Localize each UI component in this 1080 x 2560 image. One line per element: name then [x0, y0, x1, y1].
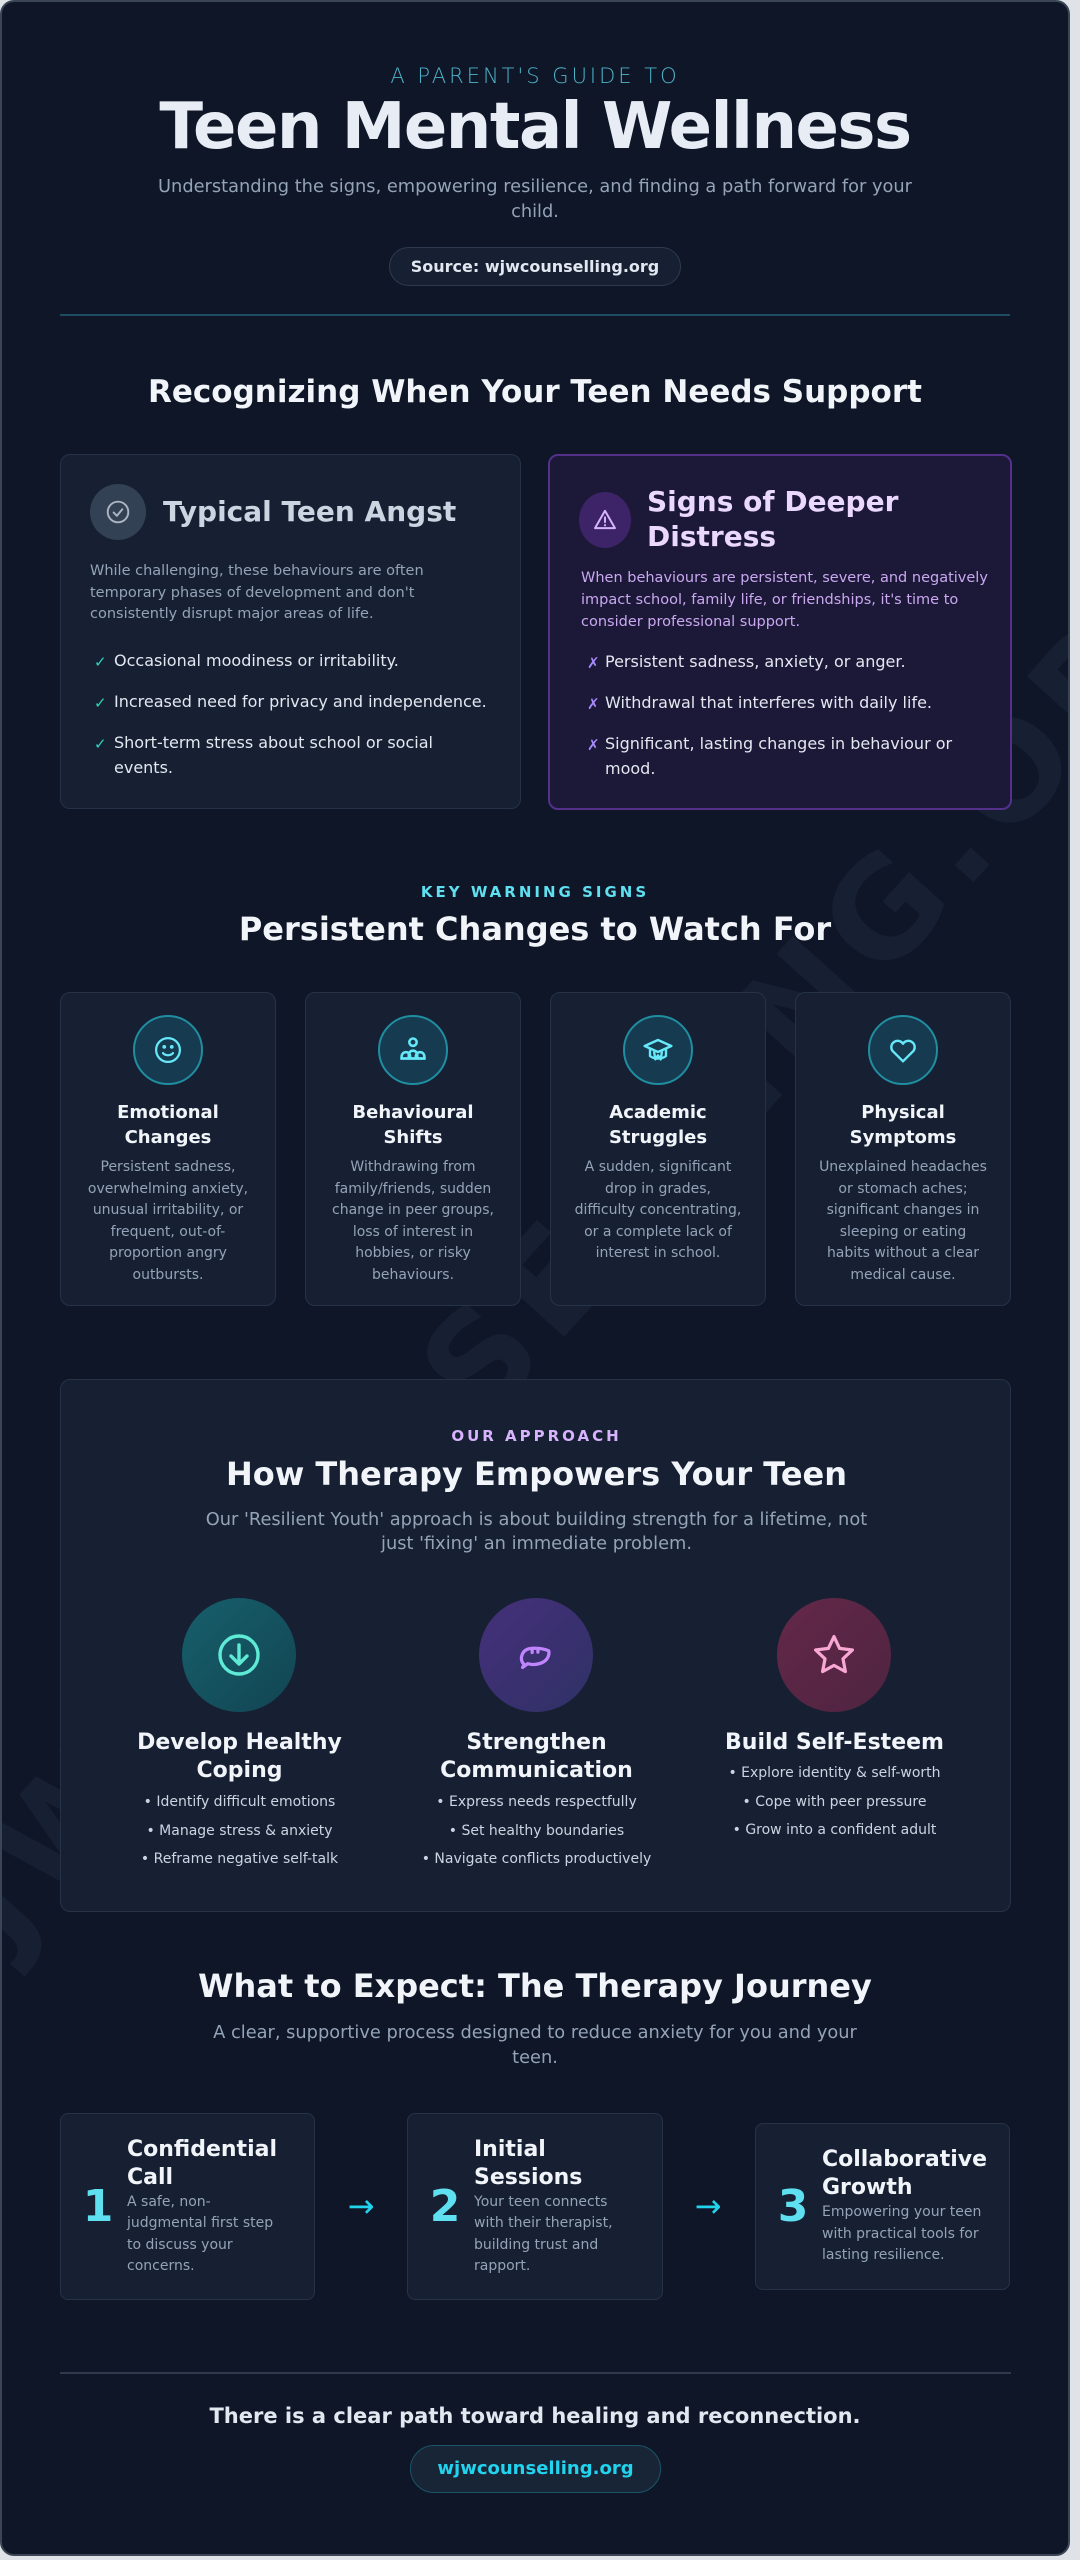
card text: change in peer groups, — [332, 1202, 494, 1218]
icon: person — [378, 1015, 448, 1085]
card text: outbursts. — [132, 1266, 203, 1282]
approach description: Our 'Resilient Youth' approach is about building strength for a lifetime, not — [206, 1509, 867, 1530]
card text: frequent, out-of- — [111, 1224, 225, 1240]
card text: or a complete lack of — [584, 1224, 732, 1240]
card text: interest in school. — [596, 1245, 720, 1261]
column title — [137, 1730, 342, 1783]
step 2: 2 — [430, 2181, 460, 2232]
title: Teen Mental Wellness — [159, 90, 911, 164]
column title: Develop Healthy — [137, 1730, 342, 1755]
column bullets — [422, 1794, 651, 1867]
card text: drop in grades, — [605, 1180, 711, 1196]
panel description: consider professional support. — [581, 614, 800, 630]
bullet list: events. — [114, 758, 173, 777]
source pill — [389, 247, 681, 286]
column bullets: • Set healthy boundaries — [449, 1823, 624, 1839]
closing statement: There is a clear path toward healing and reconnection. — [209, 2404, 861, 2428]
card: behavioural shifts — [305, 992, 521, 1306]
card text — [819, 1159, 987, 1282]
step 2: Initial — [474, 2136, 546, 2162]
icon: warning — [579, 492, 631, 548]
step 1: Call — [127, 2164, 173, 2190]
card text: hobbies, or risky — [355, 1245, 471, 1261]
icon: check circle — [90, 484, 146, 540]
column bullets: • Identify difficult emotions — [144, 1794, 335, 1810]
card text: overwhelming anxiety, — [88, 1180, 248, 1196]
column: communication — [422, 1598, 651, 1867]
card text — [575, 1159, 741, 1261]
card text — [332, 1159, 494, 1282]
card text: Unexplained headaches — [819, 1159, 987, 1175]
card title — [117, 1102, 219, 1148]
approach description: just 'fixing' an immediate problem. — [381, 1533, 692, 1554]
card title: Academic — [609, 1102, 707, 1123]
panel description: temporary phases of development and don't — [90, 584, 414, 600]
heading: how therapy empowers: How Therapy Empowers Your Teen — [226, 1455, 847, 1493]
step 3: with practical tools for — [822, 2226, 979, 2242]
step 3: 3 — [778, 2181, 808, 2232]
step 3: Empowering your teen — [822, 2204, 981, 2220]
panel title: Distress — [647, 520, 776, 553]
arrow 2: → — [695, 2187, 721, 2225]
column bullets — [141, 1794, 338, 1867]
journey description: A clear, supportive process designed to reduce anxiety for you and your — [213, 2022, 857, 2043]
column bullets: • Cope with peer pressure — [743, 1794, 926, 1810]
step 1: Confidential — [127, 2136, 277, 2162]
column title: Strengthen — [466, 1730, 607, 1755]
card title: Symptoms — [850, 1127, 956, 1148]
panel description: While challenging, these behaviours are often — [90, 563, 424, 579]
arrow 1: → — [348, 2187, 374, 2225]
step 2: rapport. — [474, 2258, 530, 2274]
step 1: to discuss your — [127, 2236, 233, 2252]
column title: Build Self-Esteem — [725, 1730, 944, 1755]
step 1: concerns. — [127, 2258, 195, 2274]
card title: Emotional — [117, 1102, 219, 1123]
card: academic struggles — [550, 992, 766, 1306]
column bullets — [728, 1765, 941, 1838]
bullet list: ✓ — [94, 735, 107, 753]
heading: recognizing: Recognizing When Your Teen Needs Support — [148, 374, 922, 410]
card text: unusual irritability, or — [93, 1202, 243, 1218]
card text: family/friends, sudden — [335, 1180, 491, 1196]
step 3: Growth — [822, 2175, 913, 2200]
card text: loss of interest in — [353, 1224, 473, 1240]
bullet list: ✗ — [587, 736, 600, 754]
journey description: teen. — [512, 2047, 558, 2068]
column bullets: • Navigate conflicts productively — [422, 1851, 651, 1867]
eyebrow: a parent's guide: A PARENT'S GUIDE TO — [390, 64, 680, 88]
website pill — [410, 2445, 661, 2493]
icon: smile — [133, 1015, 203, 1085]
bullet list: mood. — [605, 759, 655, 778]
step 3: lasting resilience. — [822, 2247, 945, 2263]
step 3: Collaborative — [822, 2147, 987, 2172]
icon: heart — [868, 1015, 938, 1085]
bullet list — [587, 652, 952, 778]
card title — [352, 1102, 474, 1148]
column title: Communication — [440, 1758, 633, 1783]
card title: Struggles — [609, 1127, 707, 1148]
card text: Withdrawing from — [350, 1159, 476, 1175]
column title: Coping — [197, 1758, 282, 1783]
step 1: judgmental first step — [127, 2215, 273, 2231]
card title: Shifts — [383, 1127, 443, 1148]
panel description: When behaviours are persistent, severe, and negatively — [581, 570, 988, 586]
source pill: Source: wjwcounselling.org — [411, 257, 659, 276]
card text: proportion angry — [109, 1245, 227, 1261]
column: coping — [137, 1598, 342, 1867]
bullet list: Increased need for privacy and independence. — [114, 692, 487, 711]
step 1: A safe, non- — [127, 2194, 211, 2210]
heading: persistent changes: Persistent Changes to Watch For — [239, 910, 831, 948]
card text: or stomach aches; — [838, 1180, 968, 1196]
column bullets: • Grow into a confident adult — [733, 1822, 936, 1838]
card title: Physical — [861, 1102, 945, 1123]
website pill: wjwcounselling.org — [437, 2458, 634, 2479]
column bullets: • Explore identity & self-worth — [728, 1765, 941, 1781]
panel title — [647, 485, 898, 553]
column: self-esteem — [725, 1598, 944, 1838]
bullet list: Short-term stress about school or social — [114, 733, 433, 752]
step 1: 1 — [83, 2181, 113, 2232]
journey description — [213, 2022, 857, 2068]
approach description — [206, 1509, 867, 1554]
bullet list: ✓ — [94, 694, 107, 712]
column bullets: • Express needs respectfully — [436, 1794, 637, 1810]
icon: graduation cap — [623, 1015, 693, 1085]
column title — [440, 1730, 633, 1783]
panel title: Typical Teen Angst — [163, 495, 456, 528]
bullet list: ✗ — [587, 654, 600, 672]
card text: difficulty concentrating, — [575, 1202, 741, 1218]
panel description: impact school, family life, or friendships, it's time to — [581, 592, 958, 608]
bullet list: Withdrawal that interferes with daily life. — [605, 693, 932, 712]
step 3 — [755, 2123, 1010, 2290]
card text: habits without a clear — [827, 1245, 979, 1261]
bullet list: Persistent sadness, anxiety, or anger. — [605, 652, 906, 671]
column bullets: • Manage stress & anxiety — [146, 1823, 333, 1839]
panel: typical teen angst — [60, 454, 521, 809]
eyebrow: our approach: OUR APPROACH — [451, 1427, 622, 1445]
card title — [850, 1102, 956, 1148]
bullet list: ✓ — [94, 653, 107, 671]
panel description: consistently disrupt major areas of life. — [90, 606, 374, 622]
panel: our approach — [60, 1379, 1011, 1912]
panel title: Signs of Deeper — [647, 485, 898, 518]
step 1 — [60, 2113, 315, 2300]
step 2: building trust and — [474, 2236, 598, 2252]
subtitle: child. — [511, 201, 559, 222]
card: physical symptoms — [795, 992, 1011, 1306]
card text: A sudden, significant — [585, 1159, 731, 1175]
card title: Behavioural — [352, 1102, 474, 1123]
panel description — [581, 570, 988, 630]
card text: significant changes in — [827, 1202, 979, 1218]
card text: medical cause. — [850, 1266, 956, 1282]
icon: chat bubble — [479, 1598, 593, 1712]
bullet list: ✗ — [587, 695, 600, 713]
column bullets: • Reframe negative self-talk — [141, 1851, 338, 1867]
step 2: Sessions — [474, 2164, 582, 2190]
panel description — [90, 563, 424, 622]
subtitle — [158, 176, 912, 222]
icon: down arrow circle — [182, 1598, 296, 1712]
bullet list: Significant, lasting changes in behaviour or — [605, 734, 952, 753]
heading: therapy journey: What to Expect: The Therapy Journey — [198, 1967, 872, 2005]
step 2: Your teen connects — [474, 2194, 607, 2210]
subtitle: Understanding the signs, empowering resilience, and finding a path forward for your — [158, 176, 912, 197]
step 2: with their therapist, — [474, 2215, 613, 2231]
eyebrow: key warning signs: KEY WARNING SIGNS — [421, 883, 649, 901]
card title: Changes — [125, 1127, 211, 1148]
bullet list — [94, 651, 487, 777]
card title — [609, 1102, 707, 1148]
bullet list: Occasional moodiness or irritability. — [114, 651, 399, 670]
card text: Persistent sadness, — [100, 1159, 236, 1175]
card text — [88, 1159, 248, 1282]
panel: signs of deeper distress — [548, 454, 1012, 810]
step 2 — [407, 2113, 663, 2300]
card text: sleeping or eating — [840, 1224, 966, 1240]
icon: star — [777, 1598, 891, 1712]
card text: behaviours. — [372, 1266, 454, 1282]
card: emotional changes — [60, 992, 276, 1306]
